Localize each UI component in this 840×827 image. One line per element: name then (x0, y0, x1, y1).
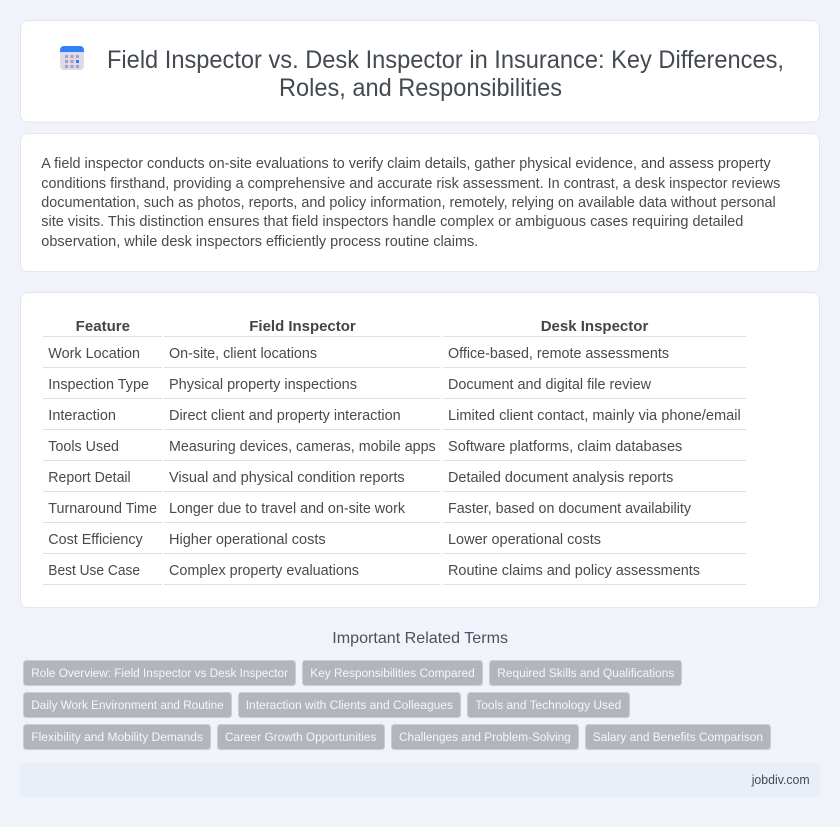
related term tags: Interaction with Clients and Colleagues (246, 698, 453, 712)
row: turnaround time: Turnaround Time (48, 501, 157, 517)
text block: intro: observation, while desk inspectors efficiently process routine claims. (41, 234, 478, 250)
row: tools used: Measuring devices, cameras, mobile apps (169, 439, 436, 455)
related term tags: Role Overview: Field Inspector vs Desk Inspector (31, 666, 288, 680)
footer: jobdiv.com (751, 773, 810, 787)
table header: Field Inspector (249, 318, 356, 335)
related term tags: Tools and Technology Used (475, 698, 621, 712)
row: tools used: Software platforms, claim databases (448, 439, 682, 455)
row: turnaround time (48, 501, 692, 517)
related term tags: Salary and Benefits Comparison (593, 730, 763, 744)
related term tags: Daily Work Environment and Routine (31, 698, 224, 712)
row: cost efficiency: Higher operational costs (169, 532, 326, 548)
table header (76, 318, 648, 335)
row: cost efficiency (48, 532, 601, 548)
title: Field Inspector vs. Desk Inspector in Insurance: Key Differences, (107, 46, 784, 74)
related term tags: Challenges and Problem-Solving (399, 730, 571, 744)
row: work location: Office-based, remote assessments (448, 346, 669, 362)
title (107, 46, 784, 102)
table header: Feature (76, 318, 130, 335)
row: tools used (48, 439, 682, 455)
row: tools used: Tools Used (48, 439, 119, 455)
text block: intro: site visits. This distinction ensures that field inspectors handle complex or ambiguous cases requiring detailed (41, 214, 743, 230)
row: cost efficiency: Cost Efficiency (48, 532, 143, 548)
row: inspection type (48, 377, 652, 393)
row: interaction (48, 408, 741, 424)
panel: intro paragraph (20, 134, 820, 272)
row: inspection type: Inspection Type (48, 377, 149, 393)
table header: Desk Inspector (541, 318, 648, 335)
row: interaction: Interaction (48, 408, 116, 424)
row: interaction: Direct client and property interaction (169, 408, 401, 424)
row: turnaround time: Faster, based on document availability (448, 501, 692, 517)
row: inspection type: Document and digital file review (448, 377, 652, 393)
row: report detail: Report Detail (48, 470, 131, 486)
row: best use case: Best Use Case (48, 563, 140, 579)
panel: title card (20, 20, 820, 122)
row: cost efficiency: Lower operational costs (448, 532, 601, 548)
text block: intro: documentation, such as photos, reports, and policy information, remotely, relying on available data without personal (41, 195, 776, 211)
row: best use case: Complex property evaluations (169, 563, 359, 579)
text block: intro (41, 156, 780, 250)
text block: intro: A field inspector conducts on-site evaluations to verify claim details, gather physical evidence, and assess property (41, 156, 771, 172)
row: work location (48, 346, 669, 362)
row: turnaround time: Longer due to travel and on-site work (169, 501, 406, 517)
related term tags: Career Growth Opportunities (225, 730, 376, 744)
row: work location: On-site, client locations (169, 346, 317, 362)
related term tags: Flexibility and Mobility Demands (31, 730, 203, 744)
panel: comparison table (20, 292, 820, 608)
heading: related terms: Important Related Terms (332, 630, 508, 647)
text block: intro: conditions firsthand, providing a comprehensive and accurate risk assessment. In contrast, a desk inspector reviews (41, 176, 780, 192)
related term tags: Required Skills and Qualifications (497, 666, 674, 680)
row: report detail: Detailed document analysis reports (448, 470, 673, 486)
row: inspection type: Physical property inspections (169, 377, 357, 393)
footer (20, 763, 820, 797)
row: best use case: Routine claims and policy assessments (448, 563, 700, 579)
row: interaction: Limited client contact, mainly via phone/email (448, 408, 741, 424)
row: report detail (48, 470, 673, 486)
row: report detail: Visual and physical condition reports (169, 470, 405, 486)
icon: calendar (60, 46, 84, 70)
title: Roles, and Responsibilities (279, 74, 562, 102)
row: best use case (48, 563, 700, 579)
row: work location: Work Location (48, 346, 140, 362)
related term tags (24, 660, 770, 750)
related term tags: Key Responsibilities Compared (310, 666, 475, 680)
